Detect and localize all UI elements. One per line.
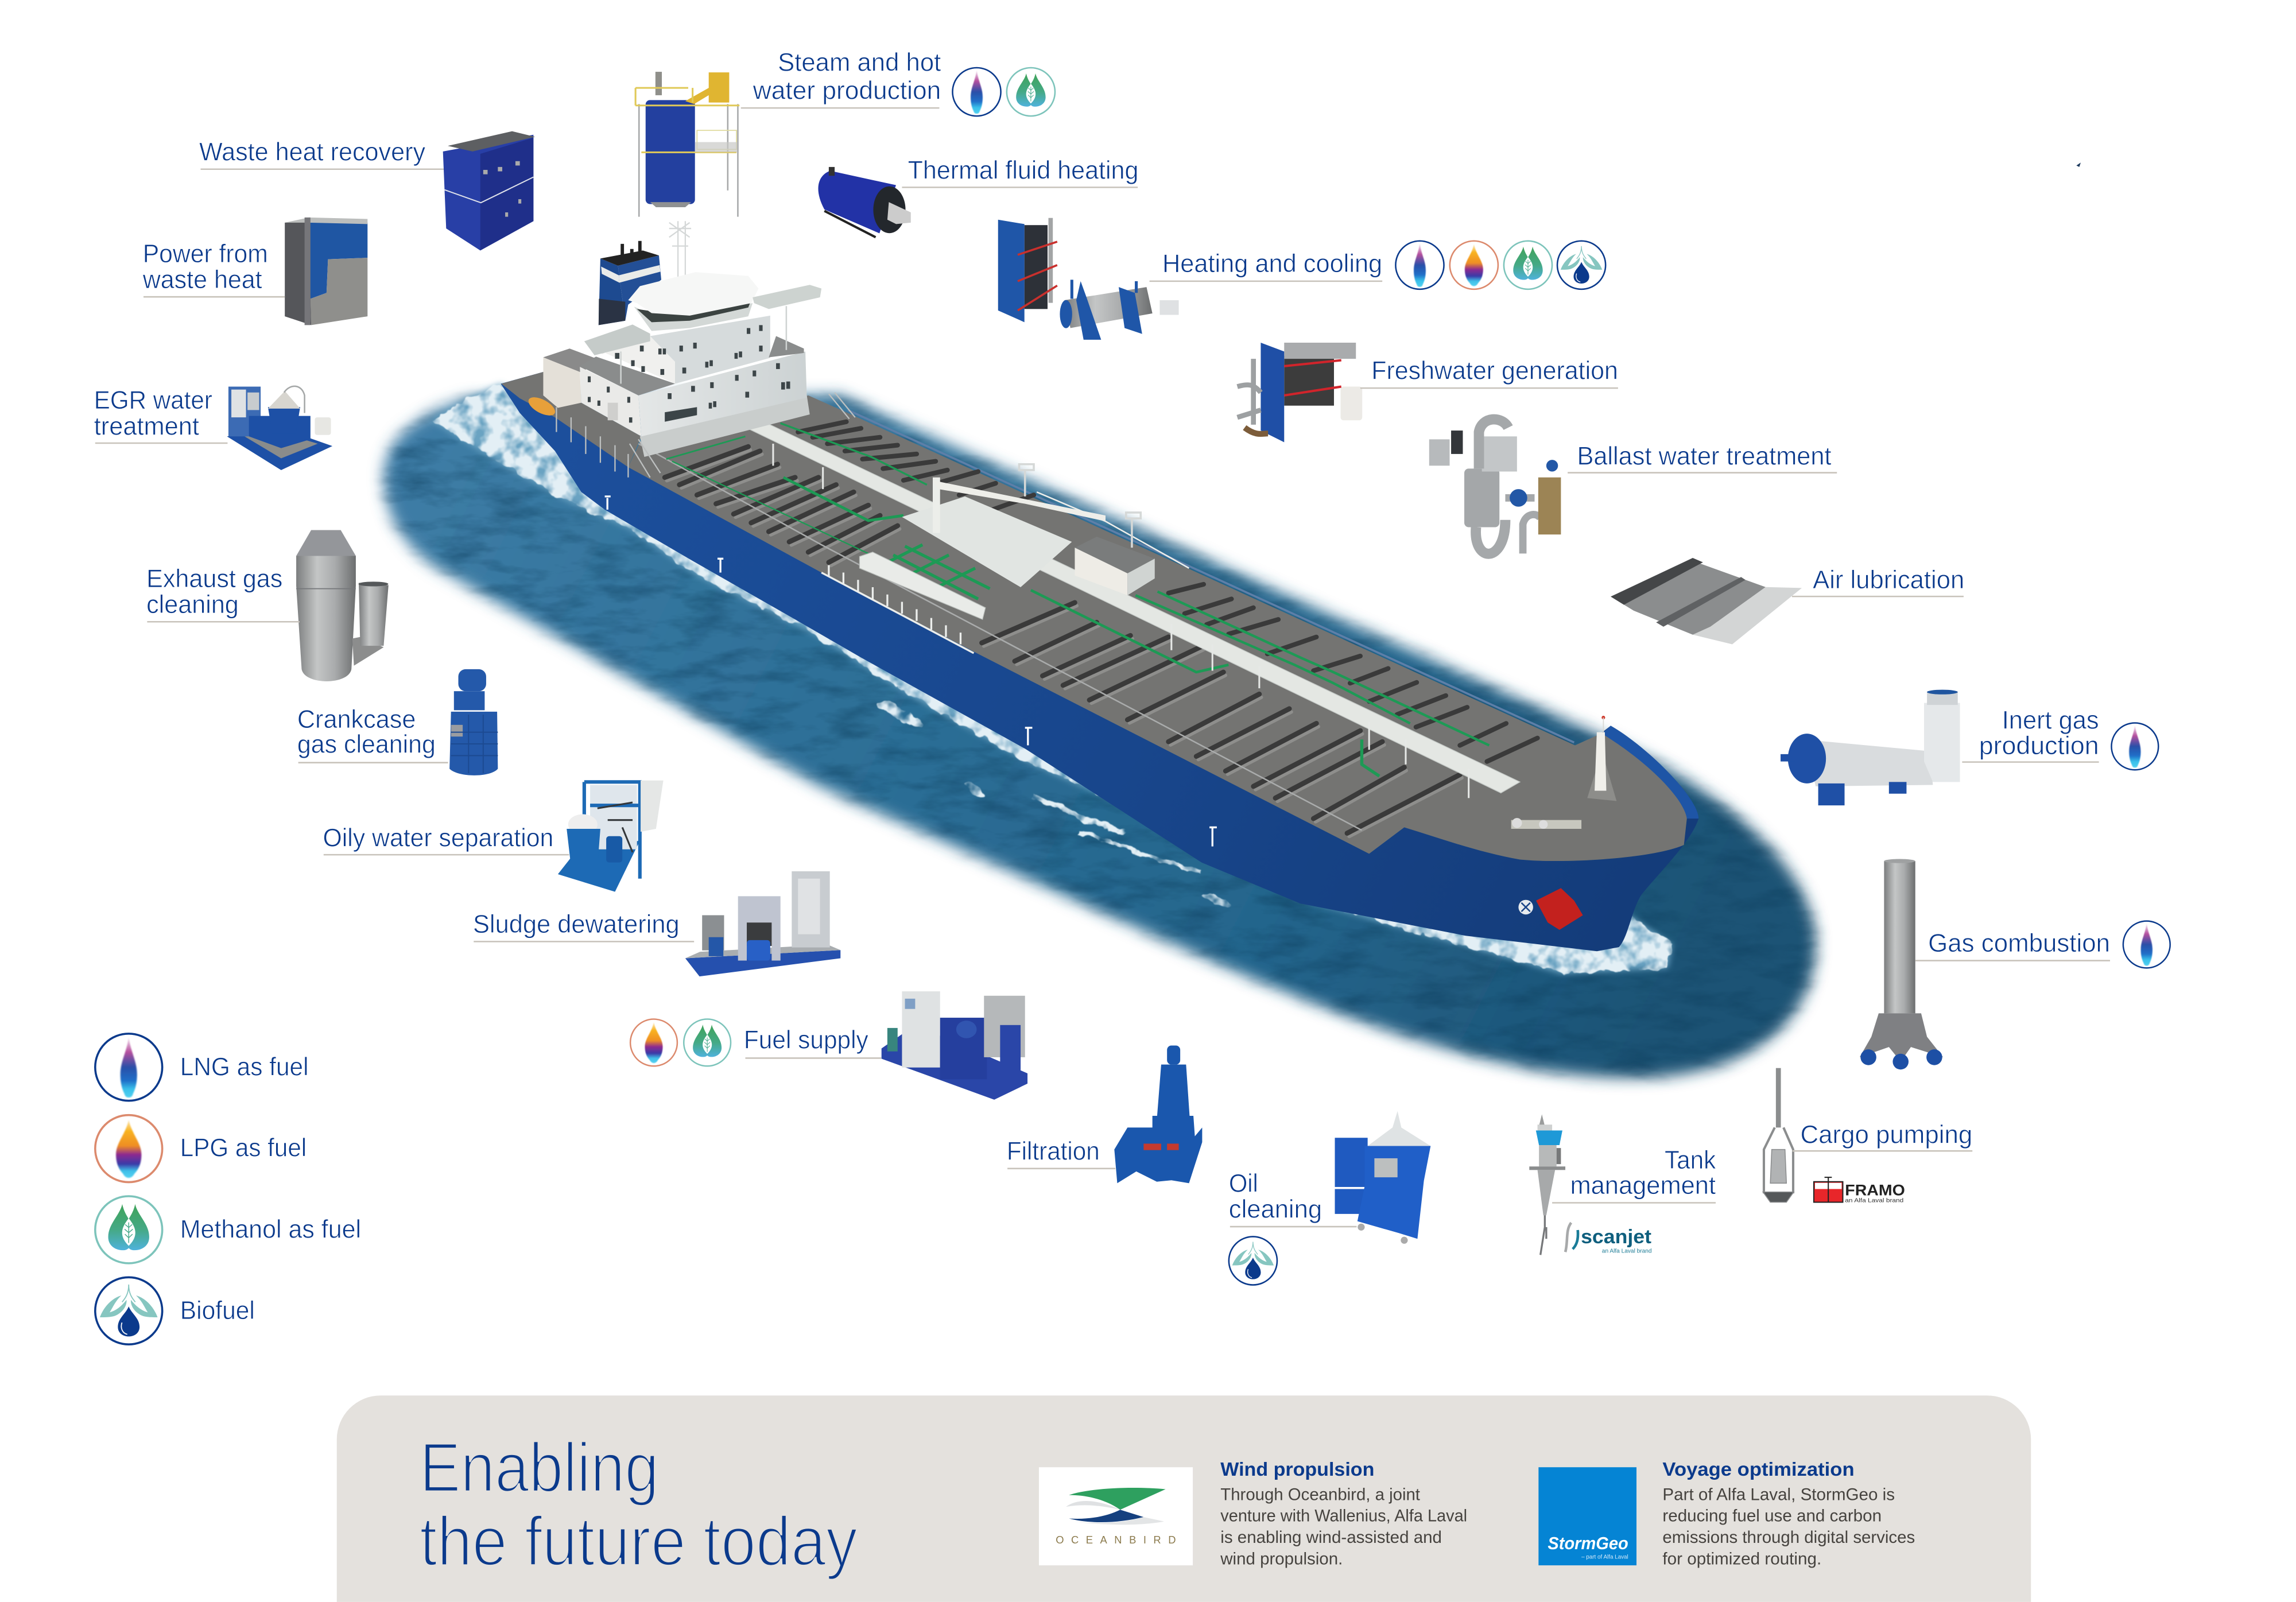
label: gas combustion: Gas combustion (1928, 929, 2110, 957)
logo: stormgeo (1538, 1467, 1636, 1565)
product: crankcase gas cleaner (449, 669, 498, 775)
label: oil cleaning (1229, 1170, 1357, 1227)
crane (933, 478, 1189, 568)
label: tank management (1552, 1146, 1716, 1203)
near rail (638, 444, 1362, 831)
product: cargo pump (1763, 1068, 1794, 1202)
label: oil cleaning: cleaning (1229, 1196, 1322, 1224)
text block: wind propulsion: venture with Wallenius, Alfa Laval (1220, 1507, 1467, 1526)
logo: framo: an Alfa Laval brand (1845, 1197, 1903, 1204)
logo: stormgeo: StormGeo (1548, 1534, 1628, 1553)
label: freshwater generation: Freshwater generation (1371, 356, 1618, 385)
green pipes (666, 423, 1489, 776)
label: EGR water treatment (94, 386, 227, 443)
product: oil cleaning separator (1335, 1111, 1430, 1244)
stern deck (501, 372, 641, 467)
deck house on platform (1075, 537, 1155, 595)
label: exhaust gas cleaning: cleaning (146, 591, 239, 619)
lifeboat (526, 394, 558, 419)
label: inert gas production: Inert gas (2002, 707, 2099, 735)
product: steam boiler (635, 72, 739, 217)
label: ballast water treatment: Ballast water treatment (1577, 443, 1832, 471)
forecastle mast (1511, 716, 1616, 829)
legend: fuel types (95, 1034, 361, 1344)
water texture (378, 390, 1822, 1083)
lower block (580, 367, 641, 436)
central platform (902, 496, 1072, 587)
label: fuel supply: Fuel supply (744, 1026, 868, 1054)
product: fuel supply unit (882, 991, 1027, 1100)
label: cargo pumping: Cargo pumping (1800, 1120, 1972, 1149)
legend item: biofuel (95, 1277, 255, 1344)
product: exhaust gas scrubber (296, 530, 389, 681)
label: steam and hot water production: water production (753, 77, 941, 105)
hull (501, 372, 1698, 951)
legend item: methanol (95, 1196, 361, 1263)
stairs and pillars (556, 393, 855, 478)
icon: LNG for inert gas (2111, 723, 2158, 770)
icons: fuel supply (630, 1019, 731, 1066)
hull draught marks (605, 496, 1217, 847)
label: filtration: Filtration (1007, 1137, 1100, 1165)
product: ballast water system (1429, 420, 1561, 554)
catwalk (725, 412, 1520, 793)
product: EGR water treatment unit (227, 386, 332, 470)
mast (669, 221, 691, 287)
product: filtration unit (1114, 1046, 1202, 1183)
bow bulwark (1602, 726, 1698, 819)
product: inert gas generator (1781, 690, 1960, 805)
legend item: LPG: LPG as fuel (180, 1134, 307, 1162)
bow anchor (1536, 888, 1583, 930)
deck ribs (665, 422, 1538, 836)
label: inert gas production: production (1979, 732, 2099, 760)
bridge wing (753, 285, 821, 309)
legend item: LNG (95, 1034, 308, 1101)
label: oily water separation: Oily water separation (323, 824, 553, 852)
label: EGR water treatment: treatment (94, 413, 200, 441)
title: Enabling (420, 1428, 659, 1506)
label: crankcase gas cleaning (297, 705, 448, 763)
legend item: biofuel: Biofuel (180, 1297, 255, 1325)
product: oily water separator (558, 781, 664, 892)
label: steam and hot water production: Steam and hot (778, 49, 941, 77)
label: EGR water treatment: EGR water (94, 386, 212, 414)
text block: wind propulsion: wind propulsion. (1220, 1549, 1343, 1568)
label: tank management: Tank (1665, 1146, 1716, 1174)
ship (501, 221, 1698, 951)
label: exhaust gas cleaning: Exhaust gas (146, 565, 282, 593)
legend item: LNG: LNG as fuel (180, 1053, 308, 1081)
catwalk supports (773, 444, 1469, 798)
logo: oceanbird (1039, 1467, 1193, 1565)
icon: biofuel for oil cleaning (1229, 1236, 1277, 1285)
manifold platform (859, 552, 986, 619)
text block: wind propulsion: Through Oceanbird, a joint (1220, 1485, 1420, 1504)
windows (588, 325, 790, 422)
label: crankcase gas cleaning: Crankcase (297, 705, 416, 734)
label: oil cleaning: Oil (1229, 1170, 1258, 1198)
upper left wing (584, 324, 650, 355)
text block: wind propulsion: is enabling wind-assisted and (1220, 1528, 1442, 1547)
text block: voyage optimization (1662, 1459, 1915, 1568)
text block: wind propulsion (1220, 1459, 1467, 1568)
funnel (599, 241, 661, 325)
logo: scanjet: an Alfa Laval brand (1602, 1248, 1652, 1255)
product: gas combustion unit (1860, 859, 1943, 1069)
label: air lubrication: Air lubrication (1813, 566, 1964, 594)
label: inert gas production (1962, 707, 2099, 762)
label: steam and hot water production (741, 49, 941, 108)
label: thermal fluid heating: Thermal fluid heating (908, 156, 1138, 184)
title: the future today (420, 1502, 858, 1580)
wake foam (430, 383, 1672, 974)
label: power from waste heat: Power from (143, 240, 268, 268)
text block: voyage optimization: for optimized routing. (1662, 1549, 1821, 1568)
logo: framo: FRAMO (1845, 1182, 1905, 1199)
main deck (628, 395, 1687, 861)
label: sludge dewatering: Sludge dewatering (473, 910, 680, 938)
product: plate and shell heat exchangers (998, 218, 1179, 340)
product: tank cleaning machine (1529, 1114, 1565, 1255)
stern low block (543, 358, 581, 408)
sea with ship wake (371, 380, 1829, 1091)
text block: voyage optimization: Voyage optimization (1662, 1459, 1855, 1480)
product: power from waste heat unit (285, 218, 367, 325)
text block: wind propulsion: Wind propulsion (1220, 1459, 1374, 1480)
bow thruster mark (1518, 900, 1533, 914)
wake underlay (430, 383, 1672, 974)
lamp posts (1019, 464, 1141, 548)
icon: LNG for gas combustion (2123, 921, 2170, 968)
label: power from waste heat (142, 240, 285, 297)
house base deck (640, 395, 810, 457)
product: waste heat recovery unit (443, 131, 535, 250)
product: thermal fluid heater (818, 167, 911, 237)
bridge (634, 303, 753, 331)
logo: scanjet (1565, 1223, 1652, 1255)
legend item: LPG (95, 1115, 307, 1182)
label: waste heat recovery: Waste heat recovery (199, 138, 426, 166)
stray mark (2076, 162, 2081, 167)
logo: stormgeo: – part of Alfa Laval (1581, 1554, 1628, 1561)
legend item: methanol: Methanol as fuel (180, 1216, 361, 1244)
label: heating and cooling: Heating and cooling (1162, 250, 1382, 278)
product: air lubrication plate (1611, 558, 1802, 645)
label: crankcase gas cleaning: gas cleaning (297, 730, 436, 758)
mid block (602, 336, 675, 383)
icons: steam fuels (952, 68, 1055, 116)
logo: scanjet: scanjet (1581, 1226, 1651, 1248)
far side hull strip and rail (848, 410, 1574, 742)
logo: oceanbird: OCEANBIRD (1056, 1534, 1176, 1546)
label: power from waste heat: waste heat (142, 266, 262, 294)
panel: enabling the future today (337, 1395, 2031, 1602)
product: sludge dewatering unit (685, 871, 840, 976)
near gangway rail (821, 565, 974, 653)
door (608, 403, 618, 420)
logo: framo (1814, 1177, 1905, 1204)
text block: voyage optimization: reducing fuel use and carbon (1662, 1507, 1882, 1526)
text block: voyage optimization: Part of Alfa Laval, StormGeo is (1662, 1485, 1895, 1504)
superstructure (543, 221, 855, 478)
label: tank management: management (1570, 1172, 1716, 1200)
product: freshwater generator (1238, 343, 1362, 442)
title (420, 1428, 858, 1580)
label: exhaust gas cleaning (146, 565, 300, 622)
text block: voyage optimization: emissions through digital services (1662, 1528, 1915, 1547)
icons: heating and cooling fuels (1395, 241, 1605, 289)
